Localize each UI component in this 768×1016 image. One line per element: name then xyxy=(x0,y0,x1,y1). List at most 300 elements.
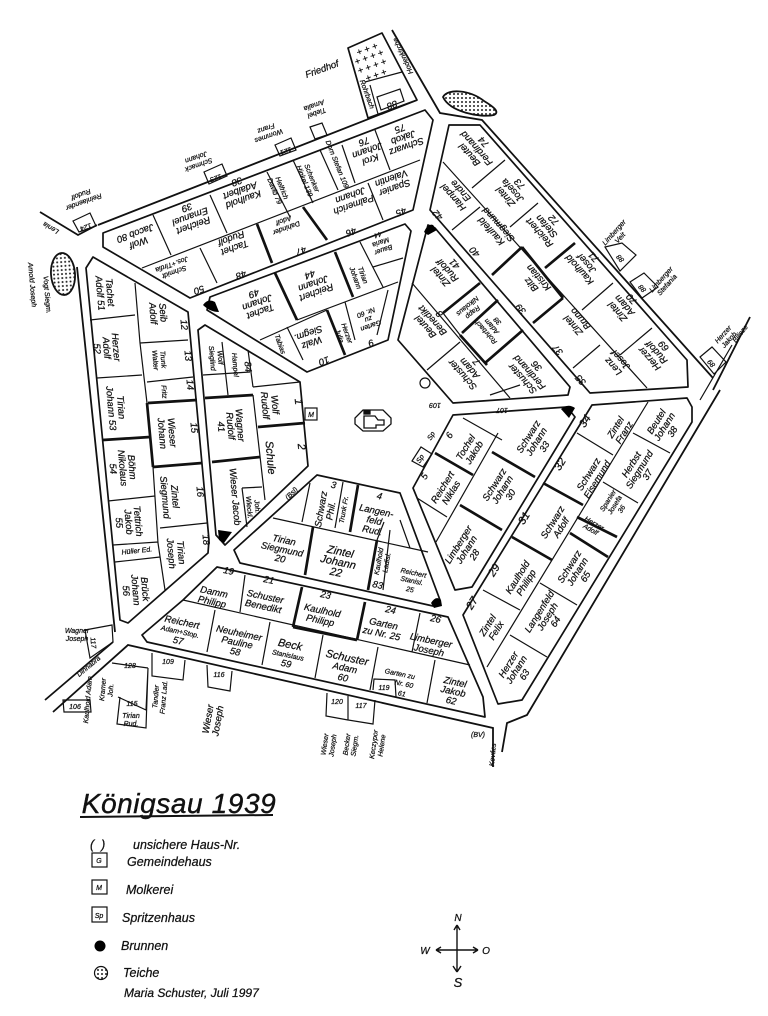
panel: south outer block: zu Nr. 25 xyxy=(361,625,402,644)
panel: south outer block: Neuheimer xyxy=(215,623,264,644)
panel: top block: Jakob xyxy=(389,127,418,147)
panel: cemetery and outlying north lots: Johann xyxy=(184,149,209,164)
panel: south-east outer block: Johann xyxy=(652,411,678,444)
panel: outlying south lots: Rud. xyxy=(124,721,138,728)
panel: south inner block: Kaulhold xyxy=(374,546,386,575)
panel: west outer block: 12 xyxy=(178,319,189,331)
panel: north-east outer block: 70 xyxy=(624,291,640,306)
panel: outlying south lots xyxy=(63,625,498,767)
panel: south outer block: Reichert xyxy=(164,614,201,632)
panel: west outer block: Brück xyxy=(138,577,151,603)
panel: cemetery and outlying north lots: Hodenkirche xyxy=(392,36,415,75)
panel: south-east inner block: Johann xyxy=(490,474,516,507)
panel: top block: Dorn Stefan 109 xyxy=(324,139,349,189)
icon: compass rose: W xyxy=(420,946,431,957)
panel: outlying north-east lots: 89 xyxy=(707,358,717,368)
panel: west outer block: Joseph xyxy=(164,537,177,569)
panel: cemetery and outlying north lots: Lenia xyxy=(42,220,60,235)
panel: west outer block: Tirian xyxy=(174,540,187,565)
legend: Spritzenhaus xyxy=(122,911,195,925)
panel: south-east outer block: Joseph xyxy=(535,601,561,634)
panel: north-east outer block: Hampel xyxy=(438,181,469,213)
panel: south outer block: Zintel xyxy=(441,675,468,691)
panel: north-east inner block: Ferdinand xyxy=(511,352,548,392)
panel: south-east outer block: 29 xyxy=(486,562,503,580)
panel: south outer block: Limberger xyxy=(409,631,454,651)
panel: south-east outer block: 36 xyxy=(617,504,627,515)
panel: north central block: Herzer xyxy=(339,322,353,345)
panel: west outer block: Wieser xyxy=(165,417,178,449)
panel: outlying south lots: Wieser xyxy=(321,733,331,756)
panel: south-east outer block: 37 xyxy=(641,467,656,482)
panel: cemetery and outlying north lots: Rohrbach xyxy=(358,79,375,110)
panel: west outer block: 52 xyxy=(91,343,103,355)
panel: south outer block: 57 xyxy=(172,635,185,648)
panel: top block: Emanuel xyxy=(170,204,210,228)
panel: north central block: Tirian xyxy=(356,266,369,285)
panel: south-east inner block: Johann xyxy=(454,534,480,567)
icon: compass rose: N xyxy=(454,913,462,924)
panel: centre features: (Bsl) xyxy=(284,486,300,502)
panel: outlying south lots: Joseph xyxy=(210,705,226,738)
panel: cemetery and outlying north lots: Arnold Joseph xyxy=(26,261,37,308)
panel: north-east outer block: 42 xyxy=(430,207,446,222)
icon: compass rose: O xyxy=(482,946,490,957)
panel: top block: 45 xyxy=(393,204,408,219)
panel: outlying south lots: 128 xyxy=(124,663,136,670)
panel: outlying north-east lots: Limberger xyxy=(602,218,628,247)
panel: top block: Johann xyxy=(334,184,368,205)
legend: unsichere Haus-Nr. xyxy=(133,838,240,852)
panel: top block: 75 xyxy=(392,121,407,135)
panel: north central block: Tachet xyxy=(245,301,275,321)
panel: outlying south lots: Joseph xyxy=(328,734,339,758)
panel: south-east outer block: Kaulhold xyxy=(504,558,533,596)
panel: west outer block: Hüller Ed. xyxy=(121,546,153,557)
panel: north central block: Bauer xyxy=(373,243,393,256)
panel: south outer block: Garten xyxy=(368,616,399,633)
panel: south inner block: 22 xyxy=(328,565,343,580)
panel: cemetery and outlying north lots xyxy=(26,33,417,314)
panel: centre features: 107 xyxy=(495,406,508,413)
panel: cemetery and outlying north lots: 124 xyxy=(79,221,92,232)
panel: south outer block: Nr. 60 xyxy=(394,679,414,690)
panel: south outer block: 60 xyxy=(336,672,350,685)
panel: south-east inner block: Schwarz xyxy=(481,466,509,503)
panel: outlying south lots: Becker xyxy=(343,733,353,756)
panel: north-east outer block: Beutel xyxy=(456,140,483,168)
panel: north-east outer block: Adam xyxy=(613,292,638,319)
panel: west inner block: Wolf xyxy=(268,395,281,416)
panel: south-east outer block: Beutel xyxy=(645,407,669,436)
panel: south outer block: 61 xyxy=(397,690,406,699)
panel: west outer block: Trunk xyxy=(158,351,167,369)
legend: Teiche xyxy=(123,966,159,980)
panel: south-east inner block: Schwarz xyxy=(515,418,543,455)
panel: south-east inner block: 30 xyxy=(504,487,519,502)
panel: south-east outer block: Adolf xyxy=(551,515,573,541)
panel: west inner block: Joh. xyxy=(252,499,261,514)
panel: top block: David 79 xyxy=(265,177,282,206)
panel: top block: Hinkel 139 xyxy=(294,165,313,198)
panel: west outer block: Zintel xyxy=(168,484,181,510)
panel: west inner block: 84 xyxy=(242,361,253,373)
panel: south inner block: Langen- xyxy=(358,502,394,520)
panel: west outer block: Tirian xyxy=(114,395,127,420)
panel: south outer block: Garten zu xyxy=(384,668,416,681)
panel: outlying north-east lots: 88 xyxy=(616,253,626,263)
panel: south outer block: Damm xyxy=(199,584,229,601)
panel: outlying south lots: Keczypor xyxy=(369,729,380,759)
panel: west inner block: Wieser Jacob xyxy=(227,468,242,526)
panel: south inner block: Siegmund xyxy=(260,540,305,560)
panel: outlying south lots: Franz Lad. xyxy=(160,680,169,714)
panel: north-east outer block: 39 xyxy=(513,301,529,316)
panel: north-east inner block: 41 xyxy=(447,256,463,271)
panel: south outer block: 24 xyxy=(383,604,397,617)
panel: south-east inner block: 6 xyxy=(444,430,456,441)
panel: cemetery and outlying north lots: + + + + xyxy=(356,56,389,77)
icon: wells xyxy=(203,225,575,608)
panel: top block: 47 xyxy=(293,243,308,258)
panel: top block: Jos.+Tirdia xyxy=(154,254,190,273)
panel: top block: Reichert xyxy=(174,214,212,236)
panel: top block: 46 xyxy=(343,224,358,239)
panel: north-east inner block: Benedikt xyxy=(416,302,449,337)
panel: outlying south lots: 116 xyxy=(213,672,225,679)
panel: cemetery and outlying north lots: 121 xyxy=(279,145,292,156)
panel: top block: Spanier xyxy=(376,176,412,198)
panel: south-east inner block: Jakob xyxy=(463,439,486,467)
panel: west inner block: Wagner xyxy=(233,408,246,443)
panel: north-east inner block: Schuster xyxy=(446,356,480,392)
panel: centre features: Sp xyxy=(427,431,437,442)
panel: west inner block: 41 xyxy=(215,421,226,433)
panel: south inner block: 20 xyxy=(273,553,287,566)
panel: north-east inner block: Zintel xyxy=(428,263,453,289)
panel: south outer block: Schuster xyxy=(246,588,285,607)
panel: north-east outer block: Josefa xyxy=(500,176,527,205)
panel: south-east outer block: Siegmund xyxy=(624,448,656,491)
panel: top block: 38 xyxy=(229,174,244,188)
panel: west outer block: 55 xyxy=(113,517,125,529)
panel: south-east inner block: Johann xyxy=(524,426,550,459)
panel: south inner block: Stanisl. xyxy=(400,576,424,587)
panel: south outer block: 23 xyxy=(318,589,333,602)
panel: south-east inner block: 33 xyxy=(538,439,553,454)
panel: cemetery and outlying north lots: Reinlaender xyxy=(64,191,102,211)
panel: north-east outer block: 73 xyxy=(512,176,528,191)
panel: cemetery and outlying north lots: Rudolf xyxy=(69,187,92,201)
panel: north central block: Reichert xyxy=(297,281,335,303)
panel: north-east inner block: Adam xyxy=(483,317,502,336)
panel: centre features: 109 xyxy=(429,401,441,408)
legend: ( ) xyxy=(90,838,105,852)
panel: south-east inner block: Limberger xyxy=(443,523,475,566)
panel: west outer block: Böhm xyxy=(125,454,138,480)
panel: north central block: 44 xyxy=(373,229,383,239)
panel: south outer block: Philipp xyxy=(197,594,227,611)
panel: west outer block: 13 xyxy=(182,350,193,362)
panel: south-east outer block: 27 xyxy=(464,594,481,613)
panel: outlying south lots: Wieser xyxy=(201,703,217,735)
panel: centre features: M xyxy=(308,412,314,419)
panel: cemetery and outlying north lots: Franz xyxy=(256,121,275,134)
panel: top block: 76 xyxy=(356,134,371,148)
panel: south-east outer block: 32 xyxy=(552,456,569,473)
panel: outlying south lots: Joseph xyxy=(65,636,88,643)
panel: top block: Valentin xyxy=(373,167,409,189)
panel: outlying north-east lots: Veit xyxy=(614,231,628,245)
panel: south inner block: Reichert xyxy=(400,568,428,580)
panel: north central block: 49 xyxy=(246,286,261,300)
panel: top block: Schmidt xyxy=(160,264,187,279)
legend: G xyxy=(96,858,102,865)
icon: compass rose: S xyxy=(454,975,463,990)
panel: north-east inner block: Beutel xyxy=(412,312,439,340)
panel: west outer block: 14 xyxy=(184,379,195,391)
panel: north-east outer block: Kaulfeld xyxy=(476,214,507,247)
panel: south outer block: Adam+Stop. xyxy=(159,625,200,640)
panel: cemetery and outlying north lots: Amalia xyxy=(302,97,326,112)
panel: centre features: Sp xyxy=(415,454,426,465)
title: Königsau 1939 xyxy=(82,788,276,819)
panel: north-east inner block: Nikolaus xyxy=(454,294,480,317)
panel: top block: 48 xyxy=(233,267,248,282)
panel: north-east outer block: Zintel xyxy=(561,312,586,338)
panel: top block: Schwarz xyxy=(387,135,425,157)
legend: Gemeindehaus xyxy=(127,855,212,869)
panel: north-east outer block: Josef xyxy=(574,250,599,276)
panel: north central block: zu xyxy=(363,314,374,323)
panel: cemetery and outlying north lots: + + + + xyxy=(353,47,386,68)
panel: south-east outer block: Franz xyxy=(614,419,636,446)
panel: outlying north-east lots: Stefania xyxy=(656,273,679,297)
panel: south outer block: Jakob xyxy=(438,684,467,700)
panel: outlying south lots: Tandler xyxy=(152,684,161,709)
panel: south-east outer block: Zintel xyxy=(605,414,627,441)
panel: top block: Adalbert xyxy=(221,178,259,201)
panel: west inner block: Hampel xyxy=(230,353,239,378)
panel: top block: Adolf xyxy=(274,213,293,226)
panel: top block: Tachet xyxy=(219,237,250,257)
panel: south-east inner block: Reichert xyxy=(429,469,457,506)
panel: west outer block: Seib xyxy=(156,303,169,323)
panel: west outer block: Johann xyxy=(128,573,142,606)
panel: north central block: Walz xyxy=(300,333,323,351)
panel: top block: Johann xyxy=(350,139,384,160)
panel: west outer block: 54 xyxy=(107,463,118,475)
panel: north central block: Johann xyxy=(240,291,274,312)
panel: south-east outer block: Eisemund xyxy=(582,458,614,501)
panel: outlying south lots: Wagner xyxy=(65,628,90,635)
panel: south outer block: Benedikt xyxy=(244,598,283,616)
panel: west outer block: 56 xyxy=(120,585,132,597)
panel: north-east inner block: 8 xyxy=(434,307,446,319)
panel: west outer block: Adolf xyxy=(99,336,113,361)
panel: west inner block: 1 xyxy=(292,398,304,405)
panel: south inner block: 4 xyxy=(376,491,383,503)
panel: west inner block: 2 xyxy=(295,442,307,450)
panel: outlying south lots: (BV) xyxy=(471,732,485,739)
panel: south outer block: Joseph xyxy=(412,642,445,659)
panel: north central block: 9 xyxy=(366,336,375,349)
panel: outlying north-east lots: Bilisze xyxy=(732,324,750,344)
panel: south inner block: 25 xyxy=(404,586,414,595)
panel: north-east outer block xyxy=(430,122,688,393)
panel: south inner block: Tirian xyxy=(271,533,297,549)
panel: south-east outer block: Herzer xyxy=(583,516,605,533)
panel: south-east outer block: Herzer xyxy=(497,649,522,680)
panel: south-east inner block xyxy=(413,407,575,590)
panel: top block: Dahinder xyxy=(271,219,301,236)
panel: north-east inner block xyxy=(398,225,570,403)
panel: south outer block: Philipp xyxy=(305,613,335,629)
panel: top block: 50 xyxy=(191,282,206,297)
panel: cemetery and outlying north lots: 88 xyxy=(384,97,399,112)
panel: north-east inner block: Adam xyxy=(458,355,483,382)
panel: south outer block: 26 xyxy=(428,613,443,626)
panel: south-east outer block: Johann xyxy=(565,556,591,589)
panel: south-east outer block: 65 xyxy=(579,569,594,584)
panel: outlying north-east lots: Limberger xyxy=(649,265,675,294)
panel: west outer block: Johann 53 xyxy=(103,385,118,432)
panel: west inner block: Sieglind xyxy=(207,346,216,372)
panel: south-east outer block: Zintel xyxy=(477,612,499,639)
panel: outlying north-east lots xyxy=(602,218,750,374)
panel: west outer block: Fritz xyxy=(159,385,168,399)
panel: south-east outer block: Herbst xyxy=(620,450,644,480)
panel: top block: Krol xyxy=(360,151,380,167)
panel: south inner block xyxy=(234,475,440,606)
panel: south outer block: Kaulhold xyxy=(303,602,342,621)
panel: north-east outer block: Ferdinand xyxy=(458,128,495,168)
panel: north central block: Johann xyxy=(296,272,330,293)
panel: south-east outer block: Schwarz xyxy=(575,456,604,493)
panel: south outer block: Schuster xyxy=(325,648,371,669)
panel: south outer block: 58 xyxy=(229,646,242,659)
panel: south inner block: Zintel xyxy=(325,543,355,561)
panel: north-east outer block: Endre xyxy=(449,177,474,203)
panel: south-east outer block: Josefa xyxy=(606,495,624,517)
panel: north central block: 10 xyxy=(316,353,331,368)
panel: north-east outer block: Zintel xyxy=(493,183,518,209)
panel: north-east inner block: 7 xyxy=(471,355,483,367)
panel: north central block: Julia xyxy=(333,327,344,344)
icon: pond north-east xyxy=(443,91,496,116)
panel: west inner block xyxy=(198,325,308,545)
panel: south inner block: 83 xyxy=(371,579,385,592)
panel: north-east outer block: Reichert xyxy=(524,215,556,249)
panel: centre features xyxy=(284,378,508,502)
panel: outlying south lots: Joh. xyxy=(107,683,116,698)
panel: outlying south lots: Siegm. xyxy=(350,734,360,757)
legend: Maria Schuster, Juli 1997 xyxy=(124,986,260,1000)
legend: Brunnen xyxy=(121,939,168,953)
panel: south-east outer block: 31 xyxy=(516,510,533,527)
panel: north central block: Nr. 60 xyxy=(356,305,376,318)
panel: outlying south lots: 119 xyxy=(378,685,390,692)
panel: top block xyxy=(103,110,433,298)
legend: Sp xyxy=(95,913,103,920)
icon: church xyxy=(355,410,391,431)
panel: south-east outer block: 38 xyxy=(666,424,681,439)
panel: north-east outer block: 72 xyxy=(546,212,562,227)
panel: top block: Kaulhold xyxy=(223,187,263,211)
panel: south inner block: feld xyxy=(366,514,384,528)
panel: cemetery and outlying north lots: 123 xyxy=(209,172,222,183)
panel: west outer block xyxy=(86,257,211,623)
legend: Molkerei xyxy=(126,883,174,897)
panel: south-east inner block: 5 xyxy=(419,471,431,482)
panel: north-east outer block: Siegmund xyxy=(480,204,517,244)
panel: north central block: Tabias xyxy=(273,334,286,356)
panel: cemetery and outlying north lots: + + + xyxy=(364,67,389,85)
panel: west outer block: Jakob xyxy=(121,508,135,535)
panel: south outer block: 21 xyxy=(261,574,275,587)
panel: outlying north-east lots: Jakob xyxy=(720,331,739,350)
panel: north central block: Garten xyxy=(359,318,382,332)
panel: north-east outer block: Bitz xyxy=(522,274,541,294)
panel: cemetery and outlying north lots: + + + xyxy=(355,41,380,59)
panel: south-east outer block: 34 xyxy=(577,413,594,430)
panel: north-east inner block: Rohrbach xyxy=(473,318,499,345)
panel: south-east outer block: Schwarz xyxy=(556,548,584,585)
panel: outlying south lots: Kaulhold Adam xyxy=(83,676,94,724)
panel: outlying south lots: 117 xyxy=(355,703,368,710)
panel: north-east outer block: Bruno xyxy=(569,305,594,331)
panel: west outer block: Siegmund xyxy=(157,476,172,520)
panel: south-east inner block: Tochel xyxy=(454,432,479,462)
panel: top block: Wolf xyxy=(126,234,149,251)
panel: west outer block: Nikolaus xyxy=(115,449,129,487)
panel: north-east inner block: Rudolf xyxy=(434,255,461,284)
panel: south outer block: Pauline xyxy=(220,634,254,652)
panel: outlying south lots: 117 xyxy=(89,637,97,650)
panel: north-east outer block: 74 xyxy=(476,134,492,149)
panel: cemetery and outlying north lots: Vogt Siegm. xyxy=(41,276,52,314)
panel: west outer block: Adolf 51 xyxy=(92,274,107,311)
panel: outlying south lots: 120 xyxy=(331,699,343,706)
panel: south-east outer block: Adolf xyxy=(581,523,600,538)
panel: west inner block: Wolf xyxy=(215,350,224,366)
panel: north-east outer block: 37 xyxy=(550,342,566,357)
panel: north-east inner block: 38 xyxy=(493,315,503,326)
panel: cemetery and outlying north lots: Wommes xyxy=(253,127,284,144)
panel: outlying south lots: 106 xyxy=(69,704,81,711)
panel: north central block: 44 xyxy=(303,267,317,281)
panel: north-east outer block: Stefan xyxy=(534,212,560,240)
panel: south-east outer block: 64 xyxy=(549,615,564,629)
panel: west outer block: Tachet xyxy=(103,278,116,307)
panel: west outer block: 18 xyxy=(200,534,211,546)
panel: south outer block: 59 xyxy=(280,658,293,671)
panel: outlying north-east lots: Herzer xyxy=(714,324,734,345)
panel: west outer block: Johann xyxy=(155,416,168,449)
panel: north-east inner block: Schuster xyxy=(506,360,540,396)
panel: north-east outer block: 71 xyxy=(586,249,602,264)
panel: north central block: Johann xyxy=(347,265,362,290)
panel: south-east outer block: Schwarz xyxy=(539,504,568,541)
panel: top block: 39 xyxy=(179,200,194,214)
panel: north-east outer block: Lenz xyxy=(603,354,625,377)
panel: west outer block: 16 xyxy=(194,486,205,498)
panel: west inner block: Rudolf xyxy=(223,412,237,442)
panel: south-east outer block: Spanier xyxy=(599,488,618,513)
panel: top block: Helfrich xyxy=(273,176,289,201)
panel: west outer block: Adolf xyxy=(146,301,159,326)
panel: north-east outer block: Kaulhold xyxy=(563,251,596,287)
